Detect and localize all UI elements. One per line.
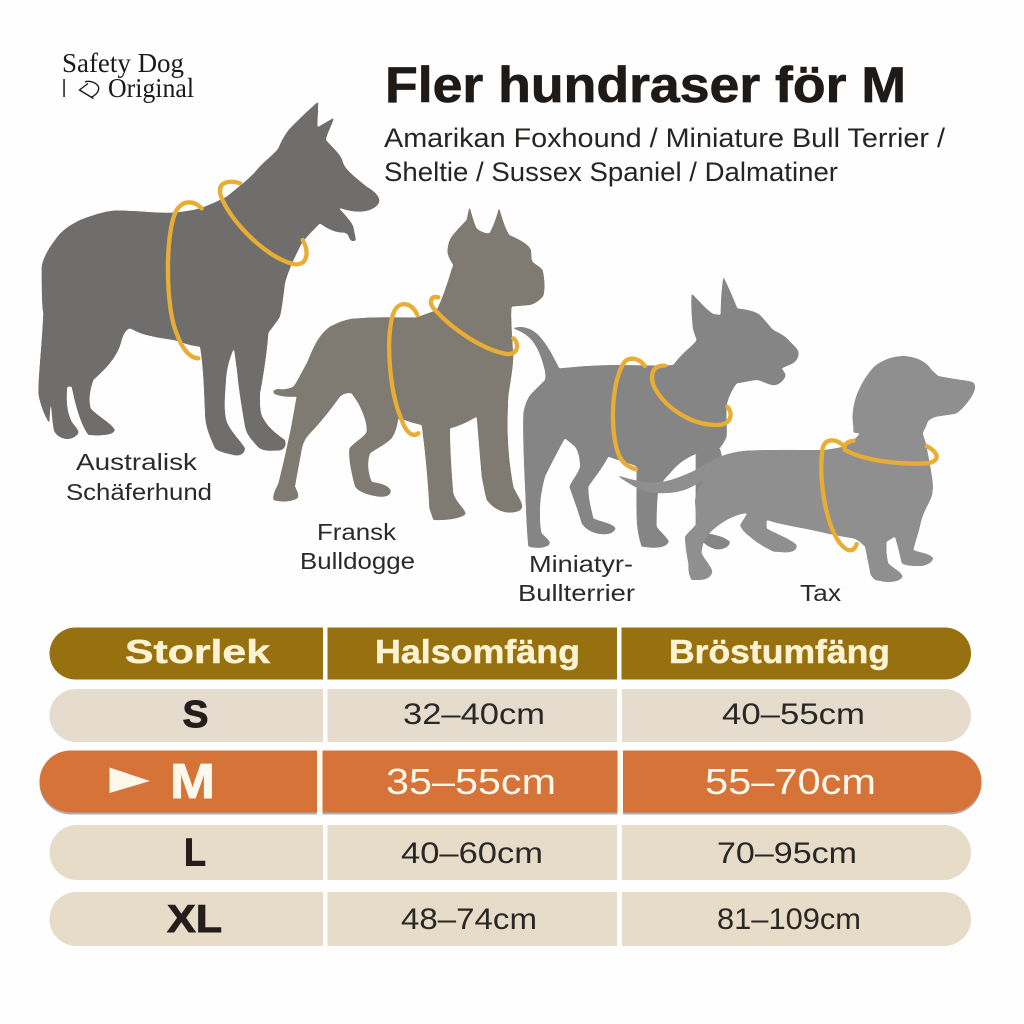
subtitle: breed list: Amarikan Foxhound / Miniature Bull Terrier / [384,123,946,153]
label: Miniatyr-Bullterrier: Miniatyr- [529,551,633,577]
label: Australisk Schäferhund: Schäferhund [66,479,212,505]
title: Fler hundraser för M [385,57,906,113]
label: Tax: Tax [800,580,842,606]
subtitle: breed list: Sheltie / Sussex Spaniel / Dalmatiner [384,157,838,187]
logo: Safety Dog Original: Safety Dog [62,48,184,78]
logo: Safety Dog Original [62,48,194,103]
dog: Australisk Schäferhund silhouette [38,102,379,455]
table header row: Halsomfäng [375,633,580,670]
subtitle: breed list [384,123,946,187]
label: Fransk Bulldogge [300,519,415,574]
row M (highlighted) [40,750,982,816]
row S: S [182,694,208,736]
row M (highlighted): 35–55cm [386,761,556,802]
dog: Tax silhouette [617,356,975,582]
row XL: XL [167,898,222,941]
label: Fransk Bulldogge: Bulldogge [300,548,415,574]
row XL: 81–109cm [717,903,861,936]
label: Australisk Schäferhund: Australisk [76,449,198,475]
row S: 32–40cm [403,698,545,731]
table header row: Storlek [125,633,271,670]
table [40,628,982,946]
label: Miniatyr-Bullterrier: Bullterrier [518,580,635,606]
row S [50,689,971,742]
logo: Safety Dog Original: Original [108,73,194,103]
row L [50,825,971,880]
dog: Fransk Bulldogge silhouette [273,207,545,520]
table header row [50,628,971,680]
row XL: 48–74cm [401,903,537,936]
row M (highlighted): M [170,755,215,809]
row S: 40–55cm [722,698,865,731]
label: Miniatyr-Bullterrier [518,551,635,606]
row M (highlighted): 55–70cm [705,761,876,802]
label: Fransk Bulldogge: Fransk [317,519,397,545]
row L: 70–95cm [717,837,857,870]
row XL [49,892,971,946]
row L: L [184,832,206,874]
icon: pointer arrow [110,768,150,793]
label: Australisk Schäferhund [66,449,212,505]
dog: Miniatyr-Bullterrier silhouette [513,277,799,549]
row L: 40–60cm [401,837,543,870]
table header row: Bröstumfäng [669,633,890,670]
